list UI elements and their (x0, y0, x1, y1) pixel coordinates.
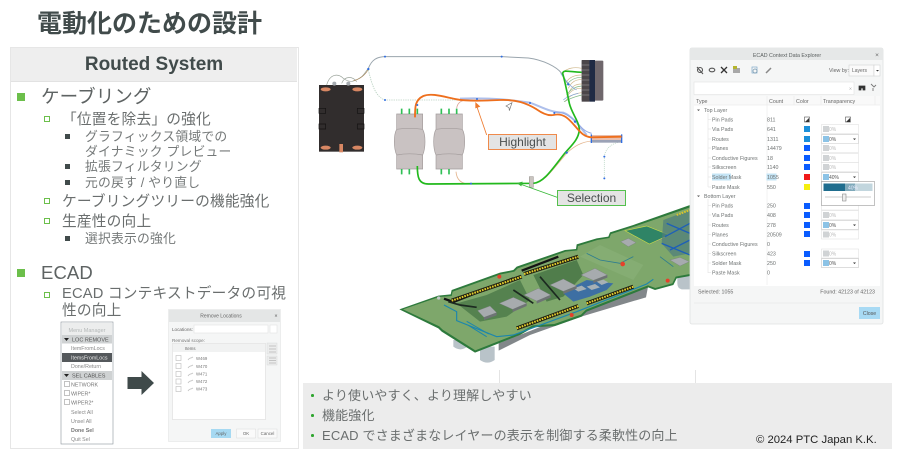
text: selection display: 選択表示の強化 (85, 231, 176, 246)
small clip (529, 177, 533, 187)
highlighted row (712, 174, 731, 180)
summary bullet dots (311, 394, 314, 437)
screenshot: remove locations dialog: Apply (216, 431, 227, 436)
text: remove location: 「位置を除去」の強化 (62, 112, 211, 128)
blue traces (444, 279, 653, 337)
row labels: 0 (767, 270, 770, 276)
wire nodes (367, 56, 605, 185)
text: productivity: 生産性の向上 (62, 214, 151, 230)
text: extended filtering: 拡張フィルタリング (85, 159, 202, 174)
wires: lower branch (456, 141, 592, 184)
dark shaded regions (457, 280, 530, 322)
leader: highlight (475, 102, 487, 135)
callout: Highlight: Highlight (499, 135, 546, 149)
text: cabling: ケーブリング (41, 86, 152, 107)
bullet: level two (44, 218, 50, 224)
row labels: 0 (767, 242, 770, 248)
panel: ECAD Context Data Explorer: 0% (829, 223, 837, 229)
row labels: 250 (767, 261, 776, 267)
bullet: level two (44, 292, 50, 298)
close button (859, 307, 880, 319)
row labels: Planes (712, 232, 729, 238)
screenshot: menu manager: ItemsFromLocs (71, 356, 108, 362)
dot (311, 414, 314, 416)
wires: upper loop (368, 57, 568, 85)
panel: ECAD Context Data Explorer: Layers (852, 68, 868, 74)
summary text: functional: 機能強化 (322, 408, 375, 423)
row labels: Conductive Figures (712, 242, 758, 248)
transparency slider popup (822, 182, 874, 206)
screenshot: menu manager: ItemFromLocs (71, 346, 105, 352)
screenshot: menu manager: Unsel All (71, 419, 92, 425)
text: undo redo: 元の戻す / やり直し (85, 175, 200, 190)
bullet: level three (65, 164, 70, 169)
screenshot: remove locations dialog: W472 (196, 379, 208, 384)
screenshot: remove locations dialog (168, 309, 281, 442)
title: 電動化のための設計 (37, 10, 262, 38)
row labels: 1311 (767, 137, 778, 143)
motor units (394, 114, 465, 169)
bullet: level three (65, 236, 70, 241)
search box: × (849, 86, 852, 92)
callout: Selection (557, 190, 626, 206)
screenshot: menu manager: Quit Sel (71, 437, 90, 443)
panel: ECAD Context Data Explorer: Color (796, 99, 809, 105)
screenshot: remove locations dialog: Locations: (172, 327, 193, 332)
panel: ECAD Context Data Explorer: Count (769, 99, 784, 105)
panel: ECAD Context Data Explorer: 0% (829, 137, 837, 143)
panel: ECAD Context Data Explorer: 40% (829, 175, 840, 181)
board edge (399, 205, 690, 353)
footer: Found: 42123 of 42123 (820, 290, 875, 296)
dot (311, 394, 314, 396)
row labels: Silkscreen (712, 165, 736, 171)
wire: green selection (417, 71, 582, 184)
faint frame line right (695, 370, 696, 383)
panel: ECAD Context Data Explorer: 0% (829, 213, 837, 219)
row labels: 641 (767, 127, 776, 133)
row labels: Paste Mask (712, 185, 740, 191)
tree lines (708, 113, 711, 273)
toolbar (697, 66, 771, 74)
text: ECAD context data: ECAD コンテキストデータの可視 (62, 286, 286, 302)
dialog title (690, 48, 883, 60)
row labels: Paste Mask (712, 270, 740, 276)
screenshot: menu manager (60, 322, 114, 444)
text: graphics preview: グラフィックス領域での (85, 129, 227, 144)
motor terminals (402, 109, 457, 174)
row labels: Planes (712, 146, 729, 152)
bullet text: ECAD list (17, 262, 286, 319)
screenshot: remove locations dialog: Remove Locations (200, 314, 242, 320)
summary text: ECAD layers: ECAD でさまざまなレイヤーの表示を制御する柔軟性の向上 (322, 428, 678, 443)
row labels: 278 (767, 223, 776, 229)
screenshot: menu manager: Done Sel (71, 428, 94, 434)
text: ECAD context data (62, 285, 286, 319)
row labels: Conductive Figures (712, 156, 758, 162)
screenshot: remove locations dialog: Items (185, 346, 196, 351)
screenshot: menu manager: Menu Manager (68, 328, 106, 334)
panel: summary (303, 383, 892, 449)
bullet text: cabling list (17, 86, 270, 246)
search box (694, 82, 876, 94)
panel: Routed System (10, 47, 299, 449)
component cluster (563, 280, 613, 302)
screenshot: menu manager: Done/Return (71, 364, 101, 370)
3D PCB model (400, 205, 690, 363)
row labels: Silkscreen (712, 252, 736, 258)
row labels: Bottom Layer (704, 194, 736, 200)
cable harness diagram (318, 56, 622, 198)
icon: arrow (128, 371, 154, 395)
footer (698, 290, 875, 296)
row labels: 550 (767, 185, 776, 191)
panel heading: Routed System (85, 54, 223, 75)
row labels: 14479 (767, 146, 782, 152)
screenshot: menu manager: SEL CABLES (72, 374, 106, 380)
row labels: 408 (767, 213, 776, 219)
row labels (704, 108, 782, 276)
table (694, 96, 880, 286)
row labels: Via Pads (712, 213, 733, 219)
footer: Selected: 1055 (698, 290, 733, 296)
battery module (319, 68, 368, 152)
right-hand dense area (625, 226, 669, 244)
panel: ECAD Context Data Explorer: Transparency (823, 99, 856, 105)
screenshot: menu manager: NETWORK (71, 382, 99, 388)
row labels: 20509 (767, 232, 782, 238)
row labels: Pin Pads (712, 204, 734, 210)
panel: ECAD Context Data Explorer: Type (696, 99, 708, 105)
transparency slider popup: 40% (848, 186, 859, 192)
screenshot: menu manager: WIPER2* (71, 400, 93, 406)
panel: ECAD Context Data Explorer: 0% (829, 165, 837, 171)
cursor (506, 103, 512, 111)
copyright: © 2024 PTC Japan K.K. (756, 434, 877, 446)
screenshot: remove locations dialog: W469 (196, 356, 208, 361)
screenshot: remove locations dialog: × (274, 314, 278, 320)
bullet: level two (44, 198, 50, 204)
transparency controls (822, 124, 858, 268)
mounting posts (453, 275, 690, 363)
connector rows (452, 257, 633, 328)
faint frame lines under the model (499, 370, 500, 383)
row labels: Top Layer (704, 108, 727, 114)
screenshot: menu manager: Select All (71, 410, 93, 416)
summary text: easier: より使いやすく、より理解しやすい (322, 388, 532, 403)
row labels: 811 (767, 118, 775, 124)
panel: ECAD Context Data Explorer: 0% (829, 261, 837, 267)
dialog title: × (875, 52, 879, 59)
row labels: 1055 (767, 175, 779, 181)
wire: orange highlight (415, 95, 622, 137)
screenshot: remove locations dialog: W473 (196, 386, 208, 392)
panel: ECAD Context Data Explorer: 0% (829, 127, 837, 133)
panel: ECAD Context Data Explorer: 0% (829, 146, 837, 152)
row labels: Solder Mask (712, 175, 742, 181)
row labels: Pin Pads (712, 118, 734, 124)
row labels: 18 (767, 156, 773, 162)
panel heading (11, 48, 297, 82)
text: ECAD: ECAD (41, 262, 93, 283)
dot (311, 434, 314, 436)
row labels: Solder Mask (712, 261, 742, 267)
row labels: 423 (767, 252, 776, 258)
color swatches (804, 117, 850, 266)
right-hand connector (582, 60, 603, 102)
row labels: Via Pads (712, 127, 733, 133)
panel: ECAD Context Data Explorer: 0% (829, 232, 837, 238)
fiducials (497, 262, 670, 317)
dialog title: ECAD Context Data Explorer (753, 53, 821, 59)
output connector (591, 134, 622, 143)
output stub wire (604, 142, 622, 178)
leader: selection (517, 182, 557, 197)
text: cabling tree: ケーブリングツリーの機能強化 (62, 194, 270, 210)
screenshot: remove locations dialog: W470 (196, 364, 208, 369)
wires: connector fan (563, 68, 582, 102)
bullet: level two (44, 116, 50, 122)
row labels: 1140 (767, 165, 778, 171)
close button: Close (863, 311, 876, 317)
panel: ECAD Context Data Explorer: 0% (829, 252, 837, 258)
text: graphics preview (85, 129, 231, 159)
screenshot: remove locations dialog: W471 (196, 372, 208, 376)
black rails (444, 257, 558, 302)
board surface (403, 207, 690, 350)
panel: ECAD Context Data Explorer: 0% (829, 156, 837, 162)
panel: ECAD Context Data Explorer (690, 48, 884, 324)
panel: ECAD Context Data Explorer: View by: (829, 68, 849, 74)
text: graphics preview: ダイナミック プレビュー (85, 144, 231, 159)
row labels: 250 (767, 204, 776, 210)
screenshot: remove locations dialog: Removal scope: (172, 338, 205, 343)
text: ECAD context data: 性の向上 (62, 303, 122, 319)
row labels: Routes (712, 223, 729, 229)
callout: Selection: Selection (567, 191, 616, 205)
bullet: level one (17, 269, 25, 277)
screenshot: menu manager: WIPER* (71, 392, 90, 398)
board underside (499, 285, 648, 351)
chips (478, 233, 689, 317)
row labels: Routes (712, 137, 729, 143)
screenshot: remove locations dialog: Cancel (261, 431, 274, 436)
bullet: level one (17, 93, 25, 101)
callout: Highlight (488, 134, 557, 150)
screenshot: menu manager: LOC REMOVE (72, 338, 109, 344)
screenshot: remove locations dialog: OK (243, 431, 249, 436)
bullet: level three (65, 180, 70, 185)
bullet: level three (65, 134, 70, 139)
